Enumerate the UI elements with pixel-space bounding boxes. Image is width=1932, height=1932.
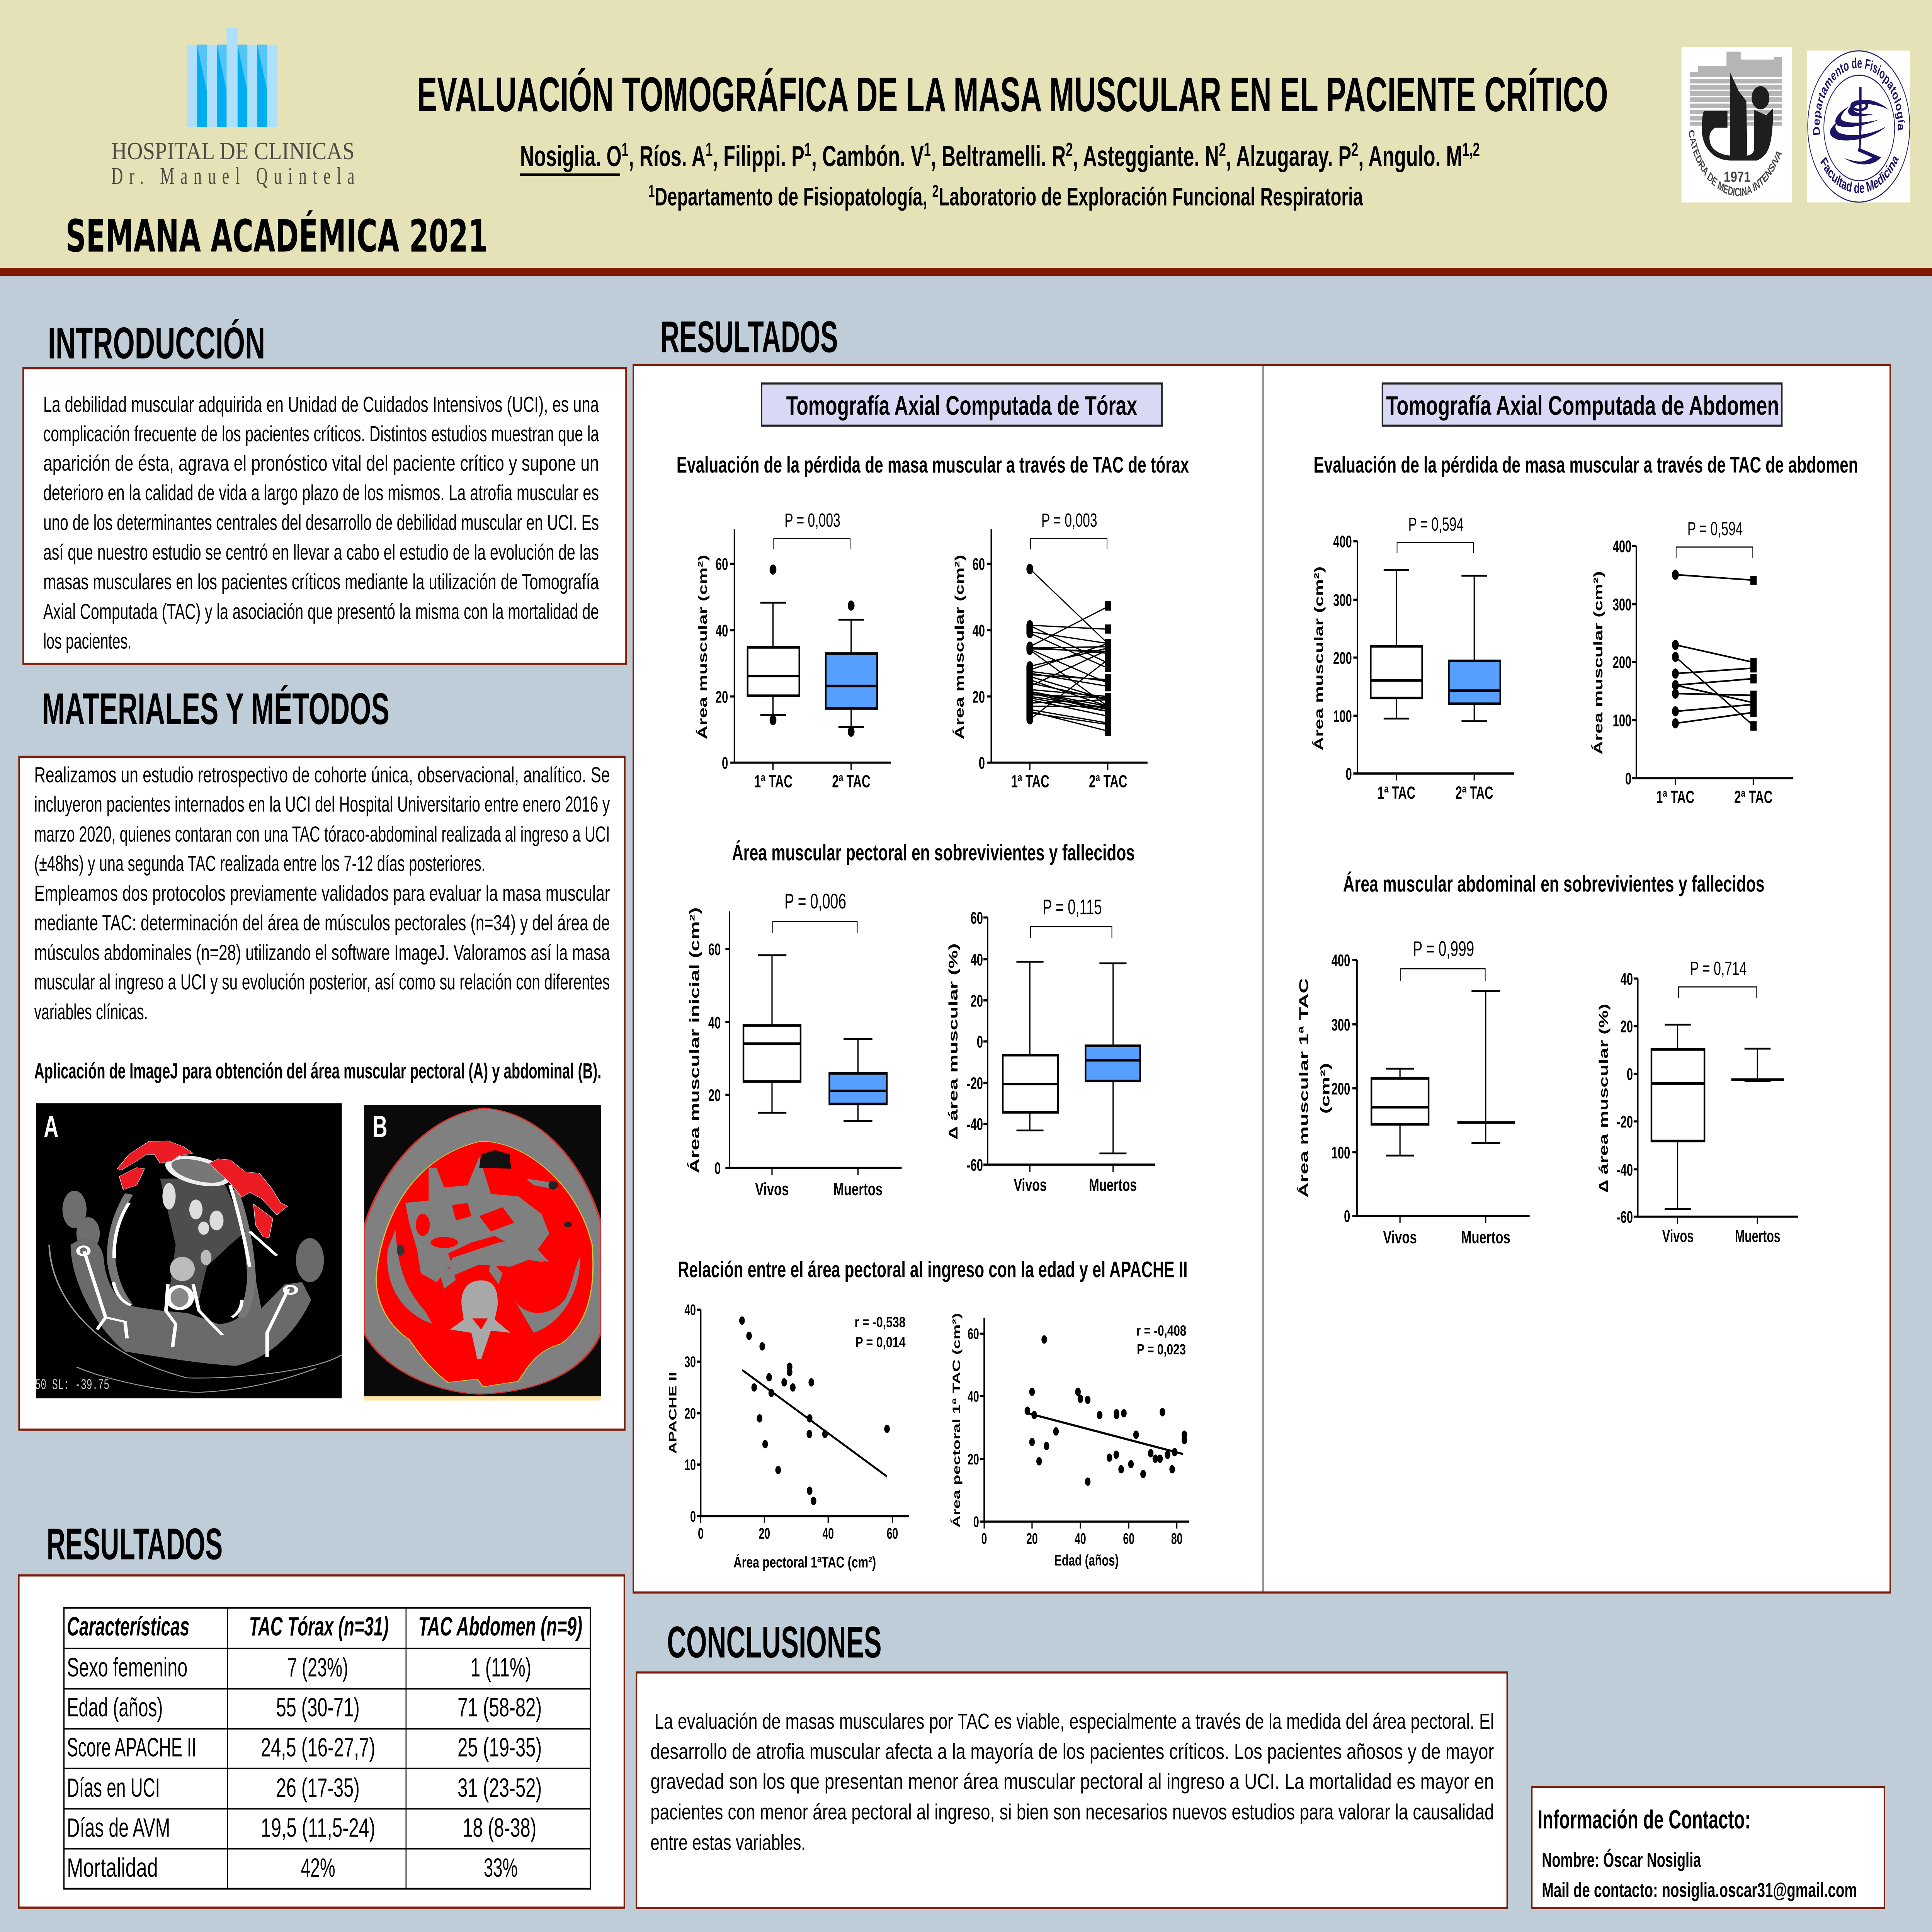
image B: tomografía de abdomen con área muscular en rojo: B — [372, 1110, 388, 1144]
panel: conclusiones: gravedad son los que presentan menor área muscular pectoral al ingreso a UCI. La mortalidad es mayor en — [650, 1769, 1494, 1794]
chart: dispersión APACHE II: 60 — [887, 1526, 898, 1543]
panel: materiales y métodos: variables clínicas. — [34, 1000, 148, 1024]
heading: Resultados (tabla): RESULTADOS — [47, 1519, 223, 1569]
panel: tabla de características: 19,5 (11,5-24) — [261, 1813, 375, 1843]
chart: dispersión edad — [950, 1313, 1189, 1569]
chart: área muscular inicial vivos y muertos: Vivos — [755, 1180, 789, 1199]
chart: dispersión edad: 60 — [1123, 1531, 1134, 1548]
section box: TAC de abdomen — [1383, 383, 1782, 426]
chart: dispersión APACHE II: 0 — [698, 1526, 704, 1543]
section box: TAC de abdomen: Tomografía Axial Computada de Abdomen — [1386, 390, 1779, 421]
chart: área abdominal vivos y muertos: 200 — [1332, 1080, 1350, 1098]
panel: información de contacto: Nombre: Óscar Nosiglia — [1542, 1848, 1701, 1871]
panel: tabla de características: 7 (23%) — [287, 1653, 348, 1682]
panel: tabla de características: Mortalidad — [67, 1853, 158, 1883]
chart: dispersión edad: 0 — [981, 1531, 987, 1548]
panel: materiales y métodos: Aplicación de ImageJ para obtención del área muscular pectoral (A) y abdominal (B). — [34, 1059, 601, 1083]
logo: Cátedra de Medicina Intensiva: CATEDRA DE MEDICINA INTENSIVA — [1687, 128, 1784, 199]
panel: introducción: aparición de ésta, agrava el pronóstico vital del paciente crítico y supone un — [43, 451, 599, 476]
panel: materiales y métodos: Empleamos dos protocolos previamente validados para evaluar la masa muscular — [34, 881, 610, 906]
panel: conclusiones — [636, 1672, 1507, 1908]
section box: TAC de tórax — [762, 383, 1162, 426]
chart: dispersión edad: 80 — [1171, 1531, 1182, 1548]
chart: delta área muscular vivos y muertos: Vivos — [1014, 1175, 1047, 1195]
chart: boxplot tórax 1ª y 2ª TAC: Área muscular (cm²) — [695, 555, 709, 739]
chart: pares abdomen 1ª y 2ª TAC: 1ª TAC — [1656, 787, 1694, 807]
logo: Departamento de Fisiopatología — [1807, 51, 1910, 202]
panel: tabla de características: Características — [67, 1612, 189, 1641]
authors: , Filippi. P — [713, 140, 804, 172]
authors: Nosiglia. O — [520, 140, 622, 172]
chart: delta área abdominal vivos y muertos: 0 — [1627, 1065, 1633, 1083]
chart: delta área abdominal vivos y muertos: Vivos — [1662, 1227, 1694, 1246]
panel: tabla de características: 1 (11%) — [471, 1653, 531, 1682]
authors: 1 — [924, 139, 931, 160]
panel: materiales y métodos: músculos abdominales (n=28) utilizando el software ImageJ. Valoramos así la masa — [34, 940, 610, 965]
authors: 2 — [1066, 139, 1073, 160]
chart: pares abdomen 1ª y 2ª TAC: 2ª TAC — [1734, 787, 1772, 807]
chart: boxplot abdomen 1ª y 2ª TAC: P = 0,594 — [1408, 514, 1464, 535]
chart: pares abdomen 1ª y 2ª TAC: 400 — [1613, 537, 1631, 556]
panel: introducción — [23, 368, 626, 664]
heading: Materiales y métodos: MATERIALES Y MÉTODOS — [42, 684, 389, 734]
authors: 1,2 — [1462, 139, 1480, 160]
chart: dispersión APACHE II: 20 — [759, 1526, 770, 1543]
chart: pares abdomen 1ª y 2ª TAC: P = 0,594 — [1687, 518, 1743, 539]
image A: tomografía de tórax con área pectoral en rojo: 50 SL: -39.75 — [35, 1377, 109, 1393]
chart: boxplot abdomen 1ª y 2ª TAC: 300 — [1333, 591, 1352, 610]
event label: Semana Académica 2021: SEMANA ACADÉMICA 2021 — [66, 210, 488, 262]
chart: delta área muscular vivos y muertos: 0 — [977, 1032, 983, 1051]
authors: 1 — [804, 139, 811, 160]
panel: tabla de características: 24,5 (16-27,7) — [261, 1733, 375, 1762]
chart: área abdominal vivos y muertos: Vivos — [1383, 1228, 1417, 1247]
panel: tabla de características: Edad (años) — [67, 1693, 163, 1722]
chart: área abdominal vivos y muertos: 100 — [1332, 1143, 1350, 1162]
chart: pares tórax 1ª y 2ª TAC: P = 0,003 — [1041, 510, 1097, 531]
chart: pares tórax 1ª y 2ª TAC: 20 — [973, 688, 985, 706]
panel: tabla de características — [19, 1575, 624, 1908]
panel: tabla de características: 71 (58-82) — [457, 1693, 542, 1722]
chart: área abdominal vivos y muertos: (cm²) — [1318, 1063, 1332, 1114]
panel: tabla de características: 26 (17-35) — [276, 1773, 360, 1803]
chart: área abdominal vivos y muertos: Muertos — [1461, 1228, 1510, 1247]
chart: pares tórax 1ª y 2ª TAC: 60 — [973, 555, 985, 573]
chart: dispersión edad: 20 — [968, 1451, 979, 1468]
chart: pares abdomen 1ª y 2ª TAC: 100 — [1613, 711, 1631, 730]
affiliations: 1 — [648, 182, 655, 200]
authors: , Cambón. V — [811, 140, 924, 172]
panel: tabla de características: 33% — [484, 1853, 518, 1883]
panel: conclusiones: pacientes con menor área pectoral al ingreso, si bien son necesarios nuevos estudios para valorar la causalidad — [650, 1800, 1494, 1824]
chart: área abdominal vivos y muertos: P = 0,999 — [1413, 937, 1474, 961]
title: EVALUACIÓN TOMOGRÁFICA DE LA MASA MUSCULAR EN EL PACIENTE CRÍTICO — [417, 67, 1608, 122]
chart: dispersión edad: P = 0,023 — [1137, 1341, 1186, 1357]
panel: introducción: La debilidad muscular adquirida en Unidad de Cuidados Intensivos (UCI), es una — [43, 392, 599, 417]
chart: área abdominal vivos y muertos — [1296, 937, 1530, 1247]
chart: dispersión edad: r = -0,408 — [1136, 1322, 1186, 1338]
chart: dispersión APACHE II: 20 — [684, 1406, 696, 1422]
chart: área abdominal vivos y muertos: 400 — [1332, 951, 1350, 970]
chart: dispersión edad: Área pectoral 1ª TAC (cm²) — [950, 1313, 963, 1528]
subtitle: relación: Relación entre el área pectoral al ingreso con la edad y el APACHE II — [678, 1257, 1187, 1282]
chart: delta área abdominal vivos y muertos: -20 — [1617, 1112, 1633, 1131]
chart: dispersión APACHE II: 40 — [684, 1302, 696, 1319]
panel: materiales y métodos: mediante TAC: determinación del área de músculos pectorales (n=34) y del área de — [34, 911, 610, 935]
chart: dispersión APACHE II: r = -0,538 — [855, 1314, 906, 1330]
chart: delta área abdominal vivos y muertos: 40 — [1621, 970, 1633, 988]
panel: materiales y métodos: marzo 2020, quienes contaran con una TAC tóraco-abdominal realizada al ingreso a UCI — [34, 822, 610, 847]
authors: 2 — [1219, 139, 1226, 160]
heading: Resultados (gráficos): RESULTADOS — [660, 312, 838, 362]
chart: delta área abdominal vivos y muertos: 20 — [1621, 1017, 1633, 1036]
panel: tabla de características: 31 (23-52) — [457, 1773, 542, 1803]
chart: delta área muscular vivos y muertos: -40 — [967, 1115, 983, 1134]
chart: pares abdomen 1ª y 2ª TAC: Área muscular (cm²) — [1591, 571, 1605, 755]
panel: introducción: Axial Computada (TAC) y la asociación que presentó la misma con la mortalidad de — [43, 600, 599, 624]
header band — [0, 0, 1932, 276]
chart: delta área muscular vivos y muertos: 60 — [971, 909, 983, 927]
chart: dispersión APACHE II: 10 — [684, 1457, 696, 1474]
authors: , Asteggiante. N — [1073, 140, 1219, 172]
chart: dispersión APACHE II — [667, 1302, 909, 1571]
chart: área muscular inicial vivos y muertos: 0 — [714, 1159, 721, 1178]
panel: tabla de características: Días de AVM — [67, 1813, 170, 1843]
chart: boxplot abdomen 1ª y 2ª TAC: Área muscular (cm²) — [1311, 566, 1326, 751]
panel: información de contacto: Mail de contacto: nosiglia.oscar31@gmail.com — [1542, 1879, 1857, 1901]
panel: tabla de características: Días en UCI — [67, 1773, 160, 1803]
chart: área muscular inicial vivos y muertos: P = 0,006 — [784, 889, 846, 913]
image B: tomografía de abdomen con área muscular en rojo — [364, 1105, 601, 1401]
panel: introducción: los pacientes. — [43, 629, 132, 653]
image A: tomografía de tórax con área pectoral en rojo: A — [44, 1110, 58, 1144]
chart: boxplot abdomen 1ª y 2ª TAC: 2ª TAC — [1456, 783, 1493, 803]
panel: conclusiones: entre estas variables. — [650, 1830, 806, 1855]
chart: área abdominal vivos y muertos: 300 — [1332, 1015, 1350, 1034]
chart: dispersión edad: 40 — [1075, 1531, 1086, 1548]
chart: boxplot tórax 1ª y 2ª TAC: P = 0,003 — [784, 510, 840, 531]
panel: información de contacto: Información de Contacto: — [1538, 1805, 1751, 1834]
image A: tomografía de tórax con área pectoral en rojo — [35, 1103, 342, 1398]
chart: boxplot tórax 1ª y 2ª TAC: 0 — [722, 754, 728, 772]
chart: delta área abdominal vivos y muertos: ∆ área muscular (%) — [1596, 1003, 1611, 1192]
panel: introducción: deterioro en la calidad de vida a largo plazo de los mismos. La atrofia muscular es — [43, 481, 599, 505]
authors — [520, 139, 1480, 176]
panel: introducción: así que nuestro estudio se centró en llevar a cabo el estudio de la evolución de las — [43, 540, 599, 565]
chart: pares abdomen 1ª y 2ª TAC: 200 — [1613, 653, 1631, 672]
chart: dispersión edad: Edad (años) — [1054, 1553, 1119, 1569]
authors: , Beltramelli. R — [931, 140, 1066, 172]
authors: 1 — [706, 139, 713, 160]
chart: dispersión APACHE II: P = 0,014 — [855, 1334, 906, 1350]
chart: delta área muscular vivos y muertos: -20 — [967, 1074, 983, 1093]
panel: tabla de características: Sexo femenino — [67, 1653, 187, 1682]
chart: área muscular inicial vivos y muertos: 20 — [708, 1086, 721, 1105]
chart: área abdominal vivos y muertos: 0 — [1344, 1207, 1350, 1226]
chart: delta área muscular vivos y muertos: 40 — [971, 951, 983, 969]
affiliations: Laboratorio de Exploración Funcional Respiratoria — [939, 182, 1363, 211]
chart: boxplot abdomen 1ª y 2ª TAC: 200 — [1333, 649, 1352, 667]
chart: boxplot abdomen 1ª y 2ª TAC: 1ª TAC — [1378, 783, 1415, 803]
chart: delta área abdominal vivos y muertos: -40 — [1617, 1161, 1633, 1179]
chart: delta área muscular vivos y muertos — [946, 895, 1155, 1195]
chart: área muscular inicial vivos y muertos: Muertos — [833, 1180, 883, 1199]
chart: delta área muscular vivos y muertos: Muertos — [1089, 1175, 1137, 1195]
logo: Departamento de Fisiopatología: Facultad de Medicina — [1818, 151, 1901, 196]
panel: tabla de características: 25 (19-35) — [457, 1733, 542, 1762]
authors: , Alzugaray. P — [1226, 140, 1351, 172]
panel: tabla de características: TAC Abdomen (n=9) — [418, 1612, 582, 1641]
authors: 2 — [1351, 139, 1358, 160]
chart: dispersión APACHE II: 30 — [684, 1354, 696, 1371]
chart: boxplot tórax 1ª y 2ª TAC: 40 — [716, 621, 728, 640]
chart: boxplot abdomen 1ª y 2ª TAC: 0 — [1346, 765, 1352, 783]
chart: pares abdomen 1ª y 2ª TAC: 0 — [1625, 769, 1631, 788]
logo: Hospital de Clínicas — [111, 28, 354, 189]
panel: conclusiones: desarrollo de atrofia muscular afecta a la mayoría de los pacientes críticos. Los pacientes añosos y de mayor — [650, 1740, 1494, 1764]
panel: tabla de características: 42% — [301, 1853, 335, 1883]
logo: Cátedra de Medicina Intensiva — [1682, 47, 1792, 202]
panel: resultados principales — [633, 365, 1890, 1592]
chart: pares abdomen 1ª y 2ª TAC — [1591, 518, 1793, 807]
chart: pares tórax 1ª y 2ª TAC: 1ª TAC — [1011, 772, 1049, 791]
panel: tabla de características: 55 (30-71) — [276, 1693, 360, 1722]
panel: materiales y métodos: (±48hs) y una segunda TAC realizada entre los 7-12 días posteriores. — [34, 852, 485, 876]
chart: boxplot tórax 1ª y 2ª TAC: 2ª TAC — [832, 772, 871, 791]
section box: TAC de tórax: Tomografía Axial Computada de Tórax — [786, 390, 1137, 421]
chart: dispersión APACHE II: Área pectoral 1ªTAC (cm²) — [733, 1554, 876, 1571]
chart: pares tórax 1ª y 2ª TAC — [952, 510, 1148, 791]
panel: introducción: uno de los determinantes centrales del desarrollo de debilidad muscular en UCI. Es — [43, 510, 599, 535]
subtitle: pérdida muscular abdomen: Evaluación de la pérdida de masa muscular a través de TAC de abdomen — [1313, 452, 1858, 478]
authors: , Angulo. M — [1358, 140, 1462, 172]
chart: pares tórax 1ª y 2ª TAC: Área muscular (cm²) — [952, 555, 966, 739]
heading: Introducción: INTRODUCCIÓN — [48, 318, 265, 368]
authors: , Ríos. A — [629, 140, 706, 172]
chart: delta área abdominal vivos y muertos: P = 0,714 — [1690, 957, 1747, 979]
chart: boxplot tórax 1ª y 2ª TAC: 20 — [716, 688, 728, 706]
chart: pares tórax 1ª y 2ª TAC: 40 — [973, 621, 985, 640]
chart: área abdominal vivos y muertos: Área muscular 1ª TAC — [1296, 978, 1311, 1198]
chart: boxplot tórax 1ª y 2ª TAC: 1ª TAC — [754, 772, 793, 791]
chart: dispersión edad: 60 — [968, 1326, 979, 1343]
heading: Conclusiones: CONCLUSIONES — [667, 1617, 882, 1667]
chart: área muscular inicial vivos y muertos: 40 — [708, 1014, 721, 1032]
chart: dispersión edad: 40 — [968, 1388, 979, 1405]
chart: boxplot abdomen 1ª y 2ª TAC: 100 — [1333, 707, 1352, 726]
affiliations: 2 — [932, 182, 939, 200]
subtitle: área pectoral: Área muscular pectoral en sobrevivientes y fallecidos — [732, 840, 1135, 866]
panel: introducción: complicación frecuente de los pacientes críticos. Distintos estudios muestran que la — [43, 422, 599, 446]
panel: tabla de características: TAC Tórax (n=31) — [249, 1612, 389, 1641]
subtitle: pérdida muscular tórax: Evaluación de la pérdida de masa muscular a través de TAC de tórax — [677, 452, 1189, 478]
chart: dispersión APACHE II: 40 — [823, 1526, 834, 1543]
logo: Departamento de Fisiopatología: Departamento de Fisiopatología — [1811, 55, 1906, 136]
logo: Hospital de Clínicas: Dr. Manuel Quintela — [111, 163, 354, 189]
logo: Hospital de Clínicas: HOSPITAL DE CLINICAS — [111, 137, 354, 165]
chart: delta área abdominal vivos y muertos — [1596, 957, 1798, 1246]
chart: pares tórax 1ª y 2ª TAC: 2ª TAC — [1089, 772, 1127, 791]
affiliations: Departamento de Fisiopatología, — [655, 182, 932, 211]
chart: dispersión edad: 0 — [973, 1514, 979, 1531]
panel: tabla de características: Score APACHE II — [67, 1733, 196, 1762]
chart: pares tórax 1ª y 2ª TAC: 0 — [979, 754, 985, 772]
chart: delta área abdominal vivos y muertos: -60 — [1617, 1208, 1633, 1226]
chart: boxplot tórax 1ª y 2ª TAC — [695, 510, 891, 791]
chart: delta área muscular vivos y muertos: -60 — [967, 1156, 983, 1174]
chart: área muscular inicial vivos y muertos: 60 — [708, 940, 721, 959]
panel: materiales y métodos: Realizamos un estudio retrospectivo de cohorte única, observacional, analítico. Se — [34, 763, 610, 787]
logo: Cátedra de Medicina Intensiva: 1971 — [1724, 168, 1751, 185]
chart: área muscular inicial vivos y muertos — [687, 889, 902, 1199]
chart: área muscular inicial vivos y muertos: Área muscular inicial (cm²) — [687, 907, 702, 1173]
chart: boxplot abdomen 1ª y 2ª TAC: 400 — [1333, 532, 1352, 551]
chart: boxplot tórax 1ª y 2ª TAC: 60 — [716, 555, 728, 573]
subtitle: área abdominal: Área muscular abdominal en sobrevivientes y fallecidos — [1343, 871, 1765, 897]
panel: introducción: masas musculares en los pacientes críticos mediante la utilización de Tomografía — [43, 570, 599, 594]
chart: dispersión APACHE II: 0 — [690, 1509, 696, 1525]
chart: pares abdomen 1ª y 2ª TAC: 300 — [1613, 595, 1631, 614]
chart: dispersión APACHE II: APACHE II — [667, 1372, 679, 1454]
panel: materiales y métodos: muscular al ingreso a UCI y su evolución posterior, así como su relación con diferentes — [34, 970, 610, 995]
panel: materiales y métodos: incluyeron pacientes internados en la UCI del Hospital Universitario entre enero 2016 y — [34, 792, 610, 817]
panel: materiales y métodos — [19, 757, 625, 1430]
chart: dispersión edad: 20 — [1026, 1531, 1038, 1548]
panel: conclusiones: La evaluación de masas musculares por TAC es viable, especialmente a través de la medida del área pectoral. El — [655, 1709, 1494, 1734]
chart: delta área muscular vivos y muertos: 20 — [971, 992, 983, 1010]
panel: información de contacto — [1532, 1787, 1884, 1908]
chart: delta área abdominal vivos y muertos: Muertos — [1735, 1227, 1781, 1246]
authors: 1 — [622, 139, 629, 160]
chart: boxplot abdomen 1ª y 2ª TAC — [1311, 514, 1514, 803]
panel: tabla de características: 18 (8-38) — [463, 1813, 536, 1843]
chart: delta área muscular vivos y muertos: P = 0,115 — [1043, 895, 1102, 919]
chart: delta área muscular vivos y muertos: ∆ área muscular (%) — [946, 943, 960, 1139]
